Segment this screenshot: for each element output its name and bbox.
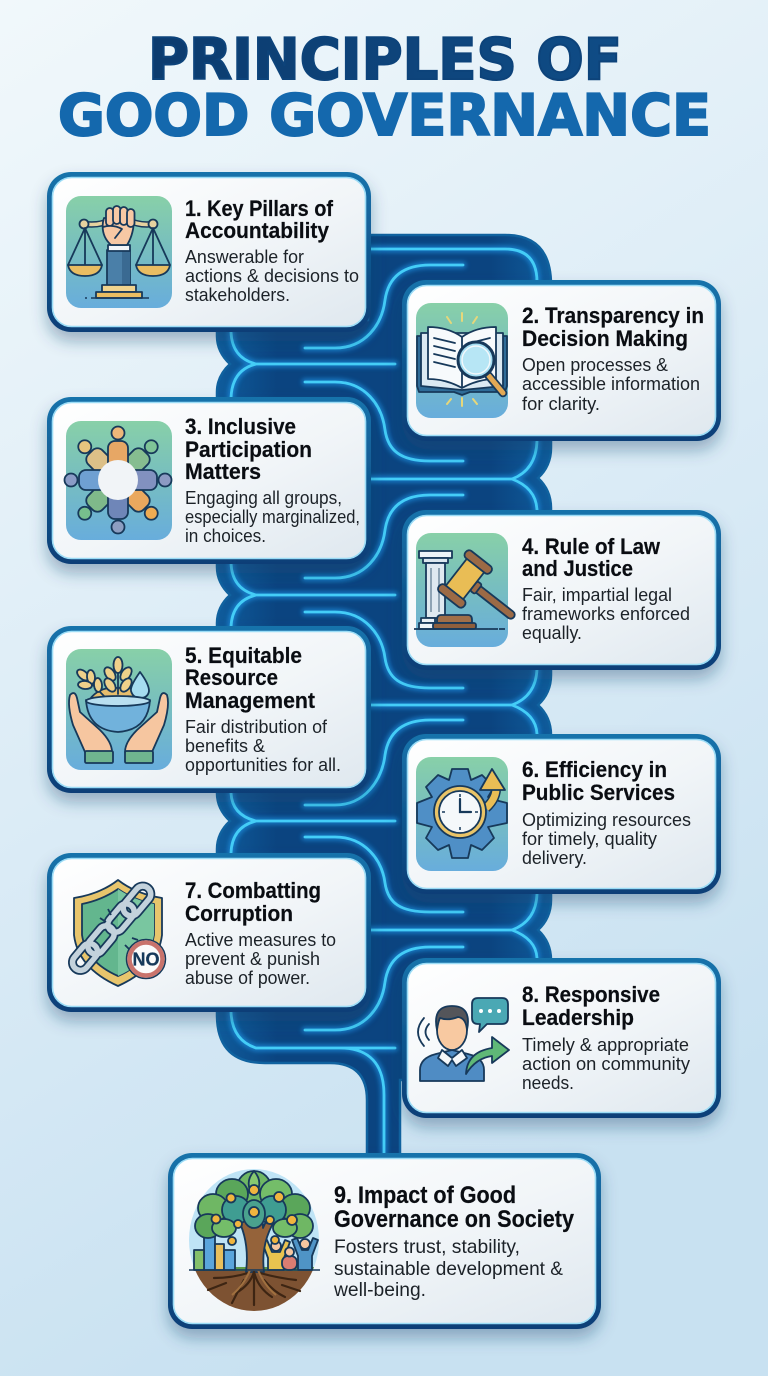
heading: Participation — [185, 437, 312, 462]
text block: action on community — [522, 1054, 690, 1074]
text block: Fair distribution of — [185, 717, 328, 737]
heading — [522, 757, 675, 805]
text block: Open processes & — [522, 355, 668, 375]
panel: 7 corruption — [47, 853, 371, 1012]
panel: 8 responsive leadership — [402, 958, 721, 1118]
text block: accessible information — [522, 374, 700, 394]
text block: needs. — [522, 1073, 574, 1093]
heading: and Justice — [522, 556, 633, 581]
title — [58, 27, 711, 149]
heading: Corruption — [185, 901, 293, 926]
panel: 6 efficiency — [402, 734, 721, 894]
text block: especially marginalized, — [185, 507, 360, 527]
text block — [185, 488, 360, 546]
text block: opportunities for all. — [185, 755, 341, 775]
text block: in choices. — [185, 526, 266, 546]
label: NO: NO — [132, 950, 160, 970]
text block: Answerable for — [185, 247, 304, 267]
heading: 9. Impact of Good — [334, 1182, 516, 1209]
heading: 7. Combatting — [185, 878, 321, 903]
heading: Leadership — [522, 1005, 634, 1030]
text block: Fosters trust, stability, — [334, 1236, 520, 1258]
text block: Fair, impartial legal — [522, 585, 672, 605]
heading: Matters — [185, 459, 261, 484]
text block: Active measures to — [185, 930, 336, 950]
icon: shield with broken chain — [69, 880, 166, 986]
text block: stakeholders. — [185, 285, 290, 305]
title: GOOD GOVERNANCE — [58, 83, 711, 149]
heading — [334, 1182, 575, 1233]
text block: Timely & appropriate — [522, 1035, 689, 1055]
heading: Decision Making — [522, 326, 688, 351]
heading: Public Services — [522, 780, 675, 805]
heading — [185, 414, 312, 484]
central connector backbone — [217, 235, 551, 1160]
text block — [522, 1035, 690, 1093]
text block: equally. — [522, 623, 582, 643]
text block: prevent & punish — [185, 949, 320, 969]
panel: 2 transparency — [402, 280, 721, 441]
heading: Accountability — [185, 218, 329, 243]
panel: 9 impact on society — [168, 1153, 601, 1329]
heading: 1. Key Pillars of — [185, 196, 333, 221]
text block: Optimizing resources — [522, 810, 691, 830]
heading — [185, 878, 321, 926]
heading: 4. Rule of Law — [522, 534, 660, 559]
icon: people around a table — [64, 421, 172, 540]
icon: gear clock and arrow — [416, 757, 508, 871]
heading — [185, 196, 333, 243]
heading: 3. Inclusive — [185, 414, 296, 439]
heading: Management — [185, 688, 315, 713]
heading — [522, 982, 660, 1030]
text block — [522, 810, 691, 868]
heading: Governance on Society — [334, 1206, 575, 1233]
panel: 5 resource management — [47, 626, 371, 793]
glowing circuit lines — [231, 249, 537, 1153]
text block: sustainable development & — [334, 1258, 563, 1280]
icon: scales and fist — [66, 196, 172, 308]
text block: delivery. — [522, 848, 587, 868]
text block: benefits & — [185, 736, 265, 756]
panel: 3 participation — [47, 397, 371, 564]
text block: actions & decisions to — [185, 266, 359, 286]
text block: for clarity. — [522, 394, 600, 414]
text block: abuse of power. — [185, 968, 310, 988]
heading: Resource — [185, 665, 278, 690]
icon: leader with speech bubble — [418, 998, 509, 1081]
heading — [522, 303, 704, 351]
text block — [185, 247, 359, 305]
icon: gavel and column — [414, 533, 530, 647]
text block — [522, 355, 700, 414]
text block: Engaging all groups, — [185, 488, 342, 508]
text block: for timely, quality — [522, 829, 657, 849]
heading: 8. Responsive — [522, 982, 660, 1007]
icon: tree with city and people — [189, 1169, 320, 1311]
heading: 6. Efficiency in — [522, 757, 667, 782]
heading — [185, 643, 315, 713]
heading — [522, 534, 660, 581]
heading: 5. Equitable — [185, 643, 302, 668]
text block — [185, 717, 341, 775]
icon: book and magnifier — [416, 303, 508, 418]
text block: frameworks enforced — [522, 604, 690, 624]
icon: hands holding bowl — [66, 649, 172, 770]
text block — [185, 930, 336, 988]
text block: well-being. — [333, 1279, 426, 1301]
text block — [333, 1236, 563, 1301]
panel: 4 rule of law — [402, 510, 721, 670]
text block — [522, 585, 690, 643]
title: PRINCIPLES OF — [148, 27, 622, 93]
panel: 1 accountability — [47, 172, 371, 332]
heading: 2. Transparency in — [522, 303, 704, 328]
